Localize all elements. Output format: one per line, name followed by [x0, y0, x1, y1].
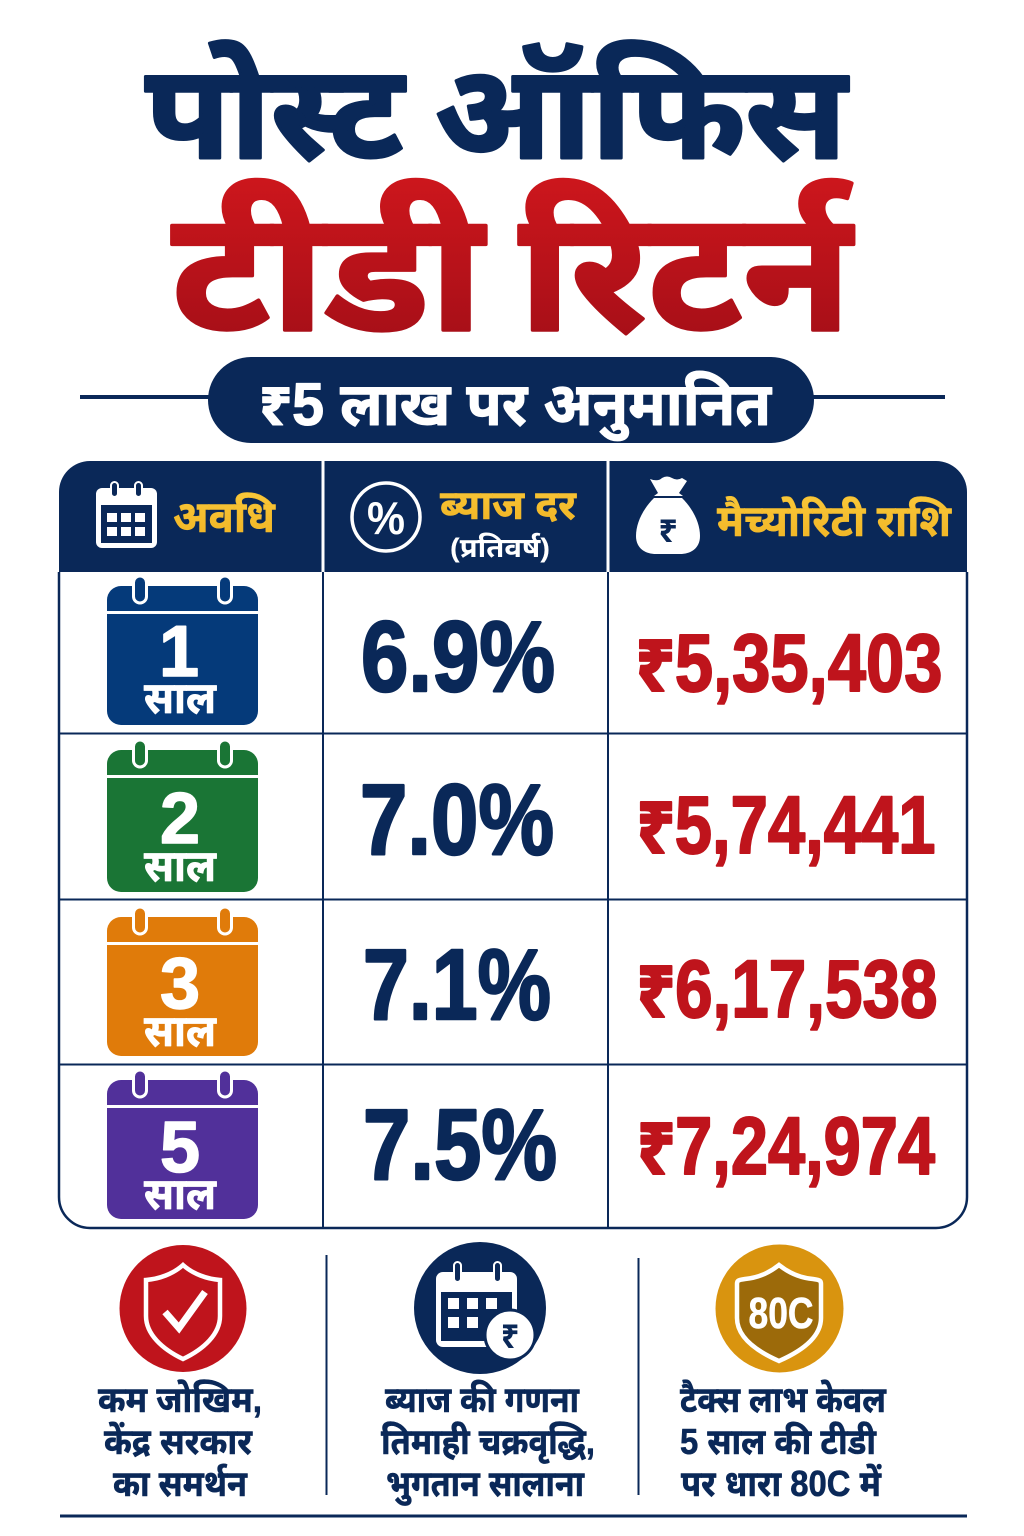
icon: calendar 2 years: 2 [160, 779, 200, 859]
icon: calendar 5 years: साल [144, 1170, 217, 1219]
text: low risk [98, 1379, 262, 1504]
rate 7.5%: 7.5% [363, 1089, 557, 1201]
row: 1 year [107, 576, 942, 725]
icon: 80C shield [716, 1244, 844, 1372]
feature: interest calculation [381, 1242, 595, 1506]
icon: calendar [96, 482, 157, 548]
row: 2 years [107, 740, 936, 892]
icon: calendar 3 years: 3 [160, 944, 200, 1024]
title: TD return: टीडी [172, 178, 486, 366]
divider [326, 1255, 328, 1495]
text: interest calculation [381, 1379, 595, 1506]
text: tax benefit: टैक्स लाभ केवल [680, 1378, 887, 1420]
text: low risk: का समर्थन [113, 1463, 248, 1504]
icon: calendar 2 years: साल [144, 842, 217, 891]
title: post office: पोस्ट [146, 39, 406, 186]
amount 5,74,441: ₹5,74,441 [636, 780, 936, 871]
text: interest calculation: भुगतान सालाना [386, 1463, 585, 1506]
text: tax benefit [680, 1378, 887, 1504]
icon: calendar 5 years [107, 1070, 258, 1219]
icon: money bag: ₹ [658, 509, 678, 550]
title: TD return [172, 178, 854, 366]
table header [59, 460, 967, 572]
icon: calendar with rupee [414, 1242, 546, 1374]
icon: 80C shield: 80C [748, 1289, 814, 1338]
amount 6,17,538: ₹6,17,538 [636, 944, 938, 1035]
returns table [59, 460, 967, 1228]
rate 6.9%: 6.9% [361, 601, 555, 713]
feature: low risk [98, 1245, 262, 1504]
bottom rule [60, 1514, 967, 1518]
icon: money bag [636, 476, 700, 554]
heading: interest rate: ब्याज दर [440, 482, 577, 528]
title: post office [146, 39, 849, 186]
text: interest calculation: ब्याज की गणना [385, 1379, 580, 1420]
icon: percent: % [367, 492, 405, 544]
heading: duration: अवधि [173, 492, 276, 542]
icon: percent [352, 483, 420, 551]
title: post office: ऑफिस [434, 39, 849, 186]
subtitle banner [80, 357, 945, 443]
rate 7.0%: 7.0% [360, 764, 554, 876]
icon: calendar 3 years [107, 907, 258, 1056]
icon: calendar 3 years: साल [144, 1007, 217, 1056]
divider [638, 1258, 640, 1495]
rate 7.1%: 7.1% [363, 929, 551, 1041]
icon: calendar with rupee: ₹ [501, 1315, 519, 1357]
amount 7,24,974: ₹7,24,974 [637, 1101, 935, 1192]
row: 5 years [107, 1070, 935, 1219]
text: low risk: केंद्र सरकार [104, 1421, 253, 1462]
feature: tax benefit [680, 1244, 887, 1504]
icon: calendar 1 year: 1 [159, 612, 199, 692]
subheading: per year: (प्रतिवर्ष) [450, 532, 550, 563]
text: tax benefit: 5 साल की टीडी [680, 1421, 877, 1462]
icon: calendar 1 year [107, 576, 258, 725]
text: low risk: कम जोखिम, [98, 1379, 262, 1420]
text: tax benefit: पर धारा 80C में [681, 1463, 882, 1504]
row: 3 years [107, 907, 938, 1056]
icon: calendar 1 year: साल [144, 674, 217, 723]
icon: calendar 2 years [107, 740, 258, 892]
subtitle banner: ₹5 लाख पर अनुमानित [259, 371, 773, 442]
text: interest calculation: तिमाही चक्रवृद्धि, [381, 1421, 595, 1465]
table grid [59, 572, 967, 1228]
icon: calendar 5 years: 5 [160, 1108, 200, 1188]
amount 5,35,403: ₹5,35,403 [636, 618, 942, 709]
icon: shield check [120, 1245, 246, 1372]
title: TD return: रिटर्न [519, 178, 854, 366]
heading: maturity amount: मैच्योरिटी राशि [717, 495, 953, 546]
